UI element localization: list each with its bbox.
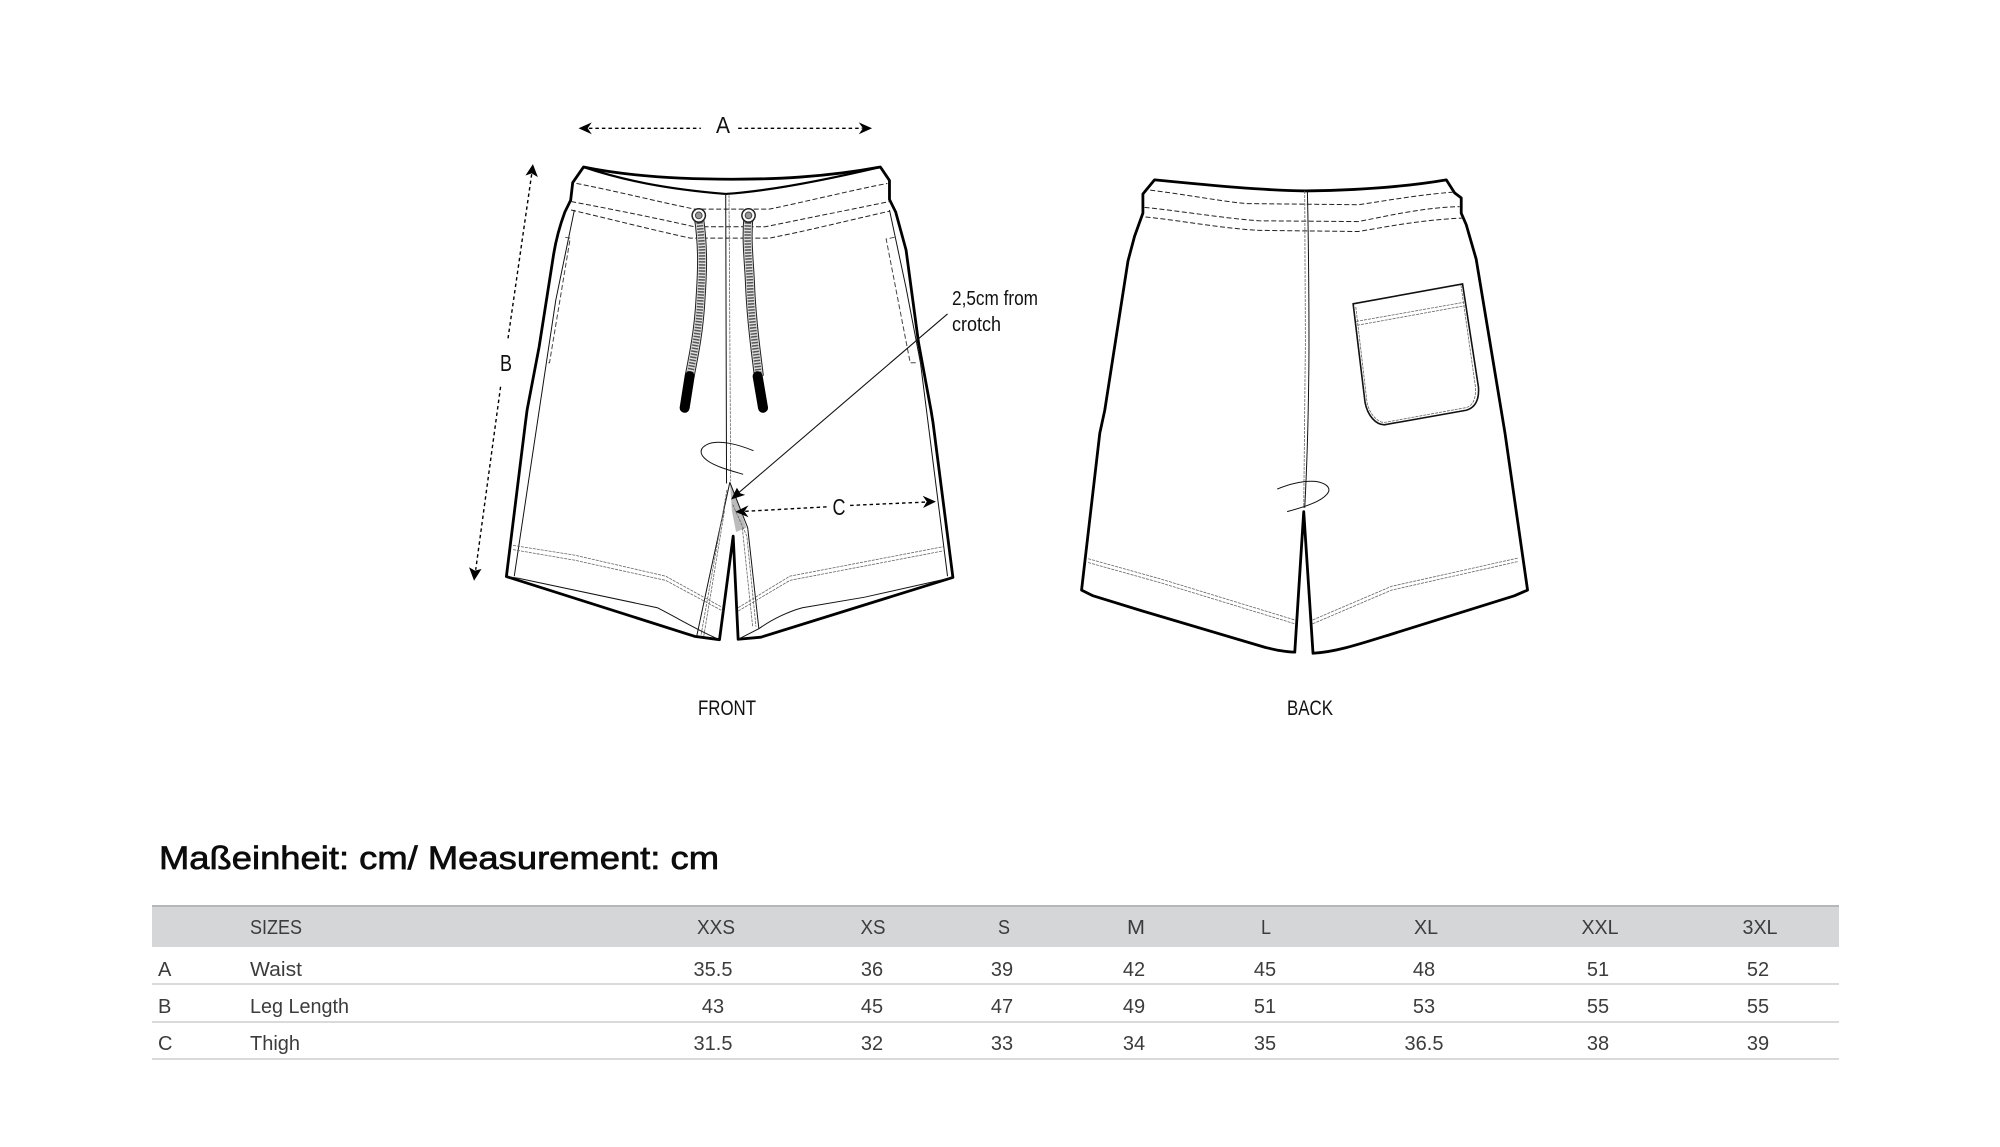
heading: Maßeinheit: cm/ Measurement: cm [159,840,719,876]
row B: leg length [152,996,1839,1023]
row B: leg length: 55 [1587,996,1609,1018]
row A: waist: 52 [1747,959,1769,981]
inner hem lines [506,577,953,640]
table header band: M [1127,917,1145,939]
callout text [952,288,1038,336]
table header band: XL [1414,917,1438,939]
row C: thigh: 36.5 [1405,1033,1443,1055]
crotch fold line [701,442,753,474]
centre front seam [726,194,731,484]
row C: thigh [152,1033,1839,1060]
callout text: 2,5cm from [952,288,1038,310]
label A: A [716,112,731,138]
row A: waist: 35.5 [694,959,732,981]
row B: leg length: 49 [1123,996,1145,1018]
back shorts technical drawing [1082,180,1528,653]
back hem stitching [1088,558,1519,624]
row A: waist: A [158,959,172,981]
table header band: SIZES [250,917,302,939]
row C: thigh: 32 [861,1033,883,1055]
front outline [506,167,953,640]
table header band: XXL [1582,917,1618,939]
row A: waist: 39 [991,959,1013,981]
row A: waist: 48 [1413,959,1435,981]
label B: B [500,350,512,376]
hem stitching [513,545,943,611]
row A: waist: 42 [1123,959,1145,981]
left drawstring [685,209,705,408]
label FRONT: FRONT [698,697,756,720]
callout leader line [731,314,948,500]
size table [152,905,1839,1060]
table header band [152,905,1839,947]
back pocket [1353,284,1479,425]
row C: thigh: 35 [1254,1033,1276,1055]
table header band: L [1261,917,1271,939]
row A: waist [152,959,1839,985]
back crotch fold line [1277,481,1329,512]
crotch gusset [697,482,759,636]
table header band: XXS [697,917,735,939]
row B: leg length: 45 [861,996,883,1018]
callout text: crotch [952,314,1001,336]
row C: thigh: 38 [1587,1033,1609,1055]
table header band: S [998,917,1010,939]
row A: waist: 51 [1587,959,1609,981]
row A: waist: 36 [861,959,883,981]
right drawstring [742,209,763,408]
measure arrow B [469,164,538,581]
back outline [1082,180,1528,653]
row B: leg length: B [158,996,171,1018]
row C: thigh: 34 [1123,1033,1145,1055]
row B: leg length: 55 [1747,996,1769,1018]
table header band: 3XL [1742,917,1778,939]
row B: leg length: Leg Length [250,996,349,1018]
row B: leg length: 47 [991,996,1013,1018]
row B: leg length: 43 [702,996,724,1018]
measure arrow C [735,496,936,517]
label C: C [832,494,846,520]
row B: leg length: 51 [1254,996,1276,1018]
front shorts technical drawing [469,122,953,640]
row C: thigh: C [158,1033,172,1055]
row C: thigh: 33 [991,1033,1013,1055]
side pockets [546,237,918,363]
table header band: XS [860,917,886,939]
row A: waist: Waist [250,959,302,981]
side seams [514,210,948,576]
row C: thigh: 31.5 [694,1033,732,1055]
centre back seam [1304,191,1309,508]
waistband stitching [571,183,889,238]
row C: thigh: 39 [1747,1033,1769,1055]
label BACK: BACK [1287,697,1333,720]
row B: leg length: 53 [1413,996,1435,1018]
measure arrow A [579,122,872,134]
row C: thigh: Thigh [250,1033,300,1055]
front waistband lower edge [584,167,880,194]
back waistband stitching [1145,190,1462,232]
row A: waist: 45 [1254,959,1276,981]
